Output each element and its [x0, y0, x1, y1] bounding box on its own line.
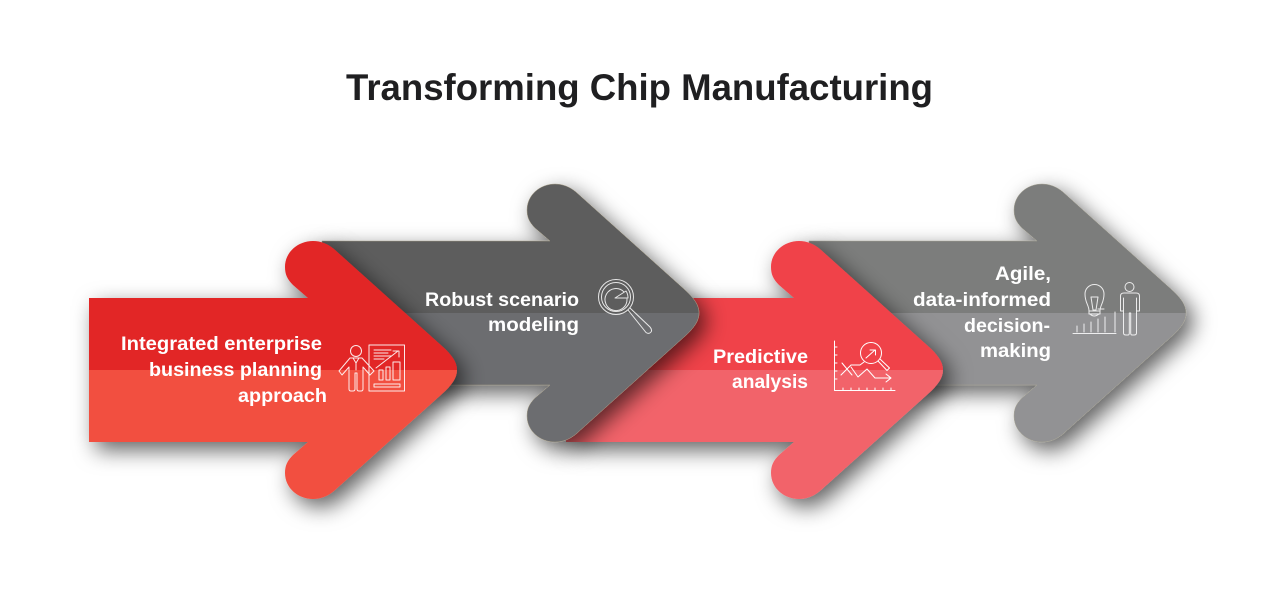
- text: agile: decision-: [964, 316, 1050, 337]
- text: integrated enterprise: approach: [238, 386, 327, 407]
- text: predictive analysis: Predictive: [713, 347, 808, 368]
- arrow shape 4: [809, 184, 1186, 442]
- text: predictive analysis: analysis: [732, 372, 808, 393]
- icon: magnifier with pie chart: [598, 280, 652, 333]
- text: agile: data-informed: [913, 290, 1051, 311]
- text: robust scenario modeling: [425, 290, 579, 336]
- arrow shape 3: [566, 241, 943, 499]
- panel: arrow 2 robust scenario modeling: [322, 184, 699, 442]
- title: Transforming Chip Manufacturing: [346, 67, 933, 108]
- text: agile: [913, 264, 1051, 362]
- arrow shape 1: [89, 241, 457, 499]
- icon: chart with magnifier: [834, 341, 895, 390]
- text: robust scenario modeling: Robust scenario: [425, 290, 579, 311]
- text: predictive analysis: [713, 347, 808, 393]
- text: agile: making: [980, 341, 1051, 362]
- text: integrated enterprise: business planning: [149, 360, 322, 381]
- icon: presenter with chart board: [339, 345, 404, 391]
- arrow shape 2: [322, 184, 699, 442]
- icon: bulb, bars and person: [1073, 282, 1140, 335]
- text: integrated enterprise: [121, 334, 327, 407]
- text: integrated enterprise: Integrated enterprise: [121, 334, 322, 355]
- text: robust scenario modeling: modeling: [488, 315, 579, 336]
- panel: arrow 3 predictive analysis: [566, 241, 943, 499]
- text: agile: Agile,: [995, 264, 1051, 285]
- panel: arrow 4 agile decision-making: [809, 184, 1186, 442]
- panel: arrow 1 integrated enterprise planning: [89, 241, 457, 499]
